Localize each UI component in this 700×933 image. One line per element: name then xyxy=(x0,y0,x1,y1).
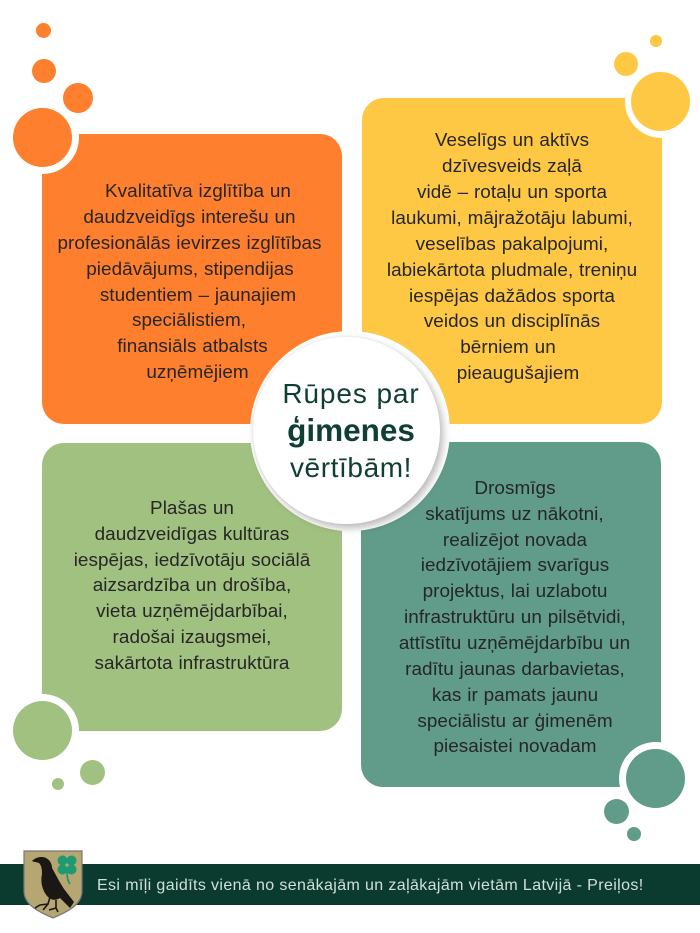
text: light green panel: daudzveidīgas kultūras xyxy=(95,524,289,544)
text: teal panel: speciālistu ar ģimenēm xyxy=(417,710,613,732)
text: yellow panel: laukumi, mājražotāju labumi, xyxy=(391,208,633,228)
text: yellow panel: Veselīgs un aktīvs xyxy=(435,130,589,150)
text: orange panel: speciālistiem, xyxy=(132,310,246,330)
text: light green panel: vieta uzņēmējdarbībai, xyxy=(96,600,288,622)
text: yellow panel: dzīvesveids zaļā xyxy=(442,156,582,176)
title: care for family values xyxy=(282,378,420,483)
text: light green panel: radošai izaugsmei, xyxy=(113,626,271,648)
text: teal panel: skatījums uz nākotni, xyxy=(425,504,604,524)
text: light green panel: Plašas un xyxy=(150,498,234,518)
title: care for family values: Rūpes par xyxy=(282,378,420,409)
footer slogan: Esi mīļi gaidīts vienā no senākajām un zaļākajām vietām Latvijā - Preiļos! xyxy=(97,877,644,894)
text: orange panel: uzņēmējiem xyxy=(146,362,249,382)
text: orange panel: finansiāls atbalsts xyxy=(117,336,268,356)
footer band xyxy=(0,864,700,905)
text: yellow panel: bērniem un xyxy=(460,336,556,358)
text: teal panel: radītu jaunas darbavietas, xyxy=(405,658,625,680)
central circle with title xyxy=(250,331,450,531)
text: teal panel: realizējot novada xyxy=(443,530,587,550)
text: teal panel: attīstītu uzņēmējdarbību un xyxy=(399,632,630,654)
clover xyxy=(58,856,76,884)
text: orange panel: Kvalitatīva izglītība un xyxy=(105,180,291,202)
text: yellow panel: iespējas dažādos sporta xyxy=(409,286,615,306)
title: care for family values: ģimenes xyxy=(287,412,415,448)
text: yellow panel: vidē – rotaļu un sporta xyxy=(417,182,607,202)
panel: orange education xyxy=(42,134,342,424)
raven xyxy=(32,857,74,912)
text: orange panel: piedāvājums, stipendijas xyxy=(86,258,294,280)
panel: yellow active lifestyle xyxy=(362,98,662,424)
text: teal panel: iedzīvotājiem svarīgus xyxy=(421,554,609,576)
text: teal panel: projektus, lai uzlabotu xyxy=(423,580,607,602)
text: teal panel: kas ir pamats jaunu xyxy=(432,684,598,706)
text: teal panel: Drosmīgs xyxy=(474,478,556,498)
icon: coat of arms with raven and clover xyxy=(23,850,83,919)
text: yellow panel: veidos un disciplīnās xyxy=(424,310,600,332)
text: yellow panel: labiekārtota pludmale, treniņu xyxy=(387,260,637,280)
text: light green panel: sakārtota infrastruktūra xyxy=(95,652,289,674)
title: care for family values: vērtībām! xyxy=(290,452,412,483)
text: orange panel: daudzveidīgs interešu un xyxy=(83,206,296,228)
panel: teal future xyxy=(361,442,661,787)
text: yellow panel: pieaugušajiem xyxy=(457,362,579,384)
text: yellow panel: veselības pakalpojumi, xyxy=(416,234,608,254)
text: orange panel: studentiem – jaunajiem xyxy=(100,284,296,306)
panel: light green culture xyxy=(42,443,342,731)
text: light green panel: iespējas, iedzīvotāju sociālā xyxy=(74,550,310,570)
text: orange panel: profesionālās ievirzes izglītības xyxy=(57,232,322,254)
text: teal panel: infrastruktūru un pilsētvidi, xyxy=(404,606,626,628)
text: light green panel: aizsardzība un drošība, xyxy=(93,574,291,596)
text: teal panel: piesaistei novadam xyxy=(433,736,597,756)
